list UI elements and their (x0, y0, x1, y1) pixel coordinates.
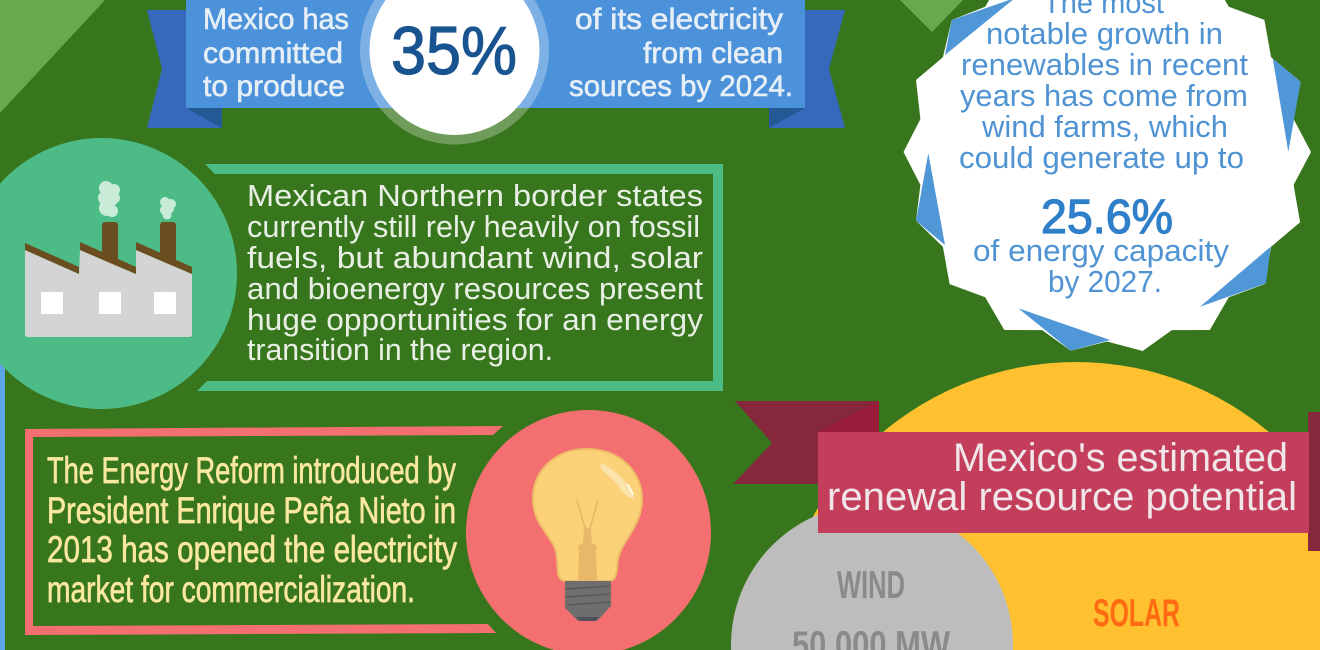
text: northern border states: huge opportunities for an energy (247, 302, 704, 337)
text: wind farms growth: notable growth in (986, 16, 1223, 51)
text: energy reform: President Enrique Peña Nieto in (47, 490, 456, 531)
ribbon text: right: of its electricity (575, 3, 783, 36)
text: energy reform: 2013 has opened the electricity (47, 529, 457, 570)
text: northern border states: currently still rely heavily on fossil (247, 209, 700, 244)
text: wind farms growth: wind farms, which (981, 109, 1228, 144)
ribbon text: right (569, 3, 793, 103)
ribbon text: right: from clean (643, 37, 783, 70)
panel: northern border states (197, 164, 723, 391)
heading text: Mexico's estimated (953, 436, 1288, 480)
ribbon text: left: committed (203, 37, 343, 70)
ribbon text: left: Mexico has (203, 3, 349, 36)
text: wind farms growth: renewables in recent (961, 47, 1248, 82)
text: energy reform (47, 450, 457, 610)
bubble: wind (731, 504, 1013, 650)
text: wind farms growth: of energy capacity (973, 233, 1230, 268)
text: northern border states: transition in the region. (247, 332, 553, 367)
ribbon text: right: sources by 2024. (569, 70, 793, 103)
ribbon text: left (203, 3, 349, 103)
icon: factory in green circle (0, 138, 237, 409)
heading text (827, 436, 1297, 519)
icon: light bulb in red circle (466, 410, 711, 650)
text: wind farms growth: years has come from (960, 78, 1248, 113)
text: northern border states: Mexican Northern border states (247, 178, 703, 213)
bubble: solar: SOLAR (1093, 592, 1180, 635)
percentage circle: 35% (360, 0, 549, 144)
panel: energy reform (25, 426, 503, 635)
ribbon text: left: to produce (203, 70, 345, 103)
text: wind farms growth: by 2027. (1048, 264, 1162, 299)
ribbon: Mexico clean electricity commitment (147, 0, 845, 144)
text: energy reform: The Energy Reform introduced by (47, 450, 456, 491)
text: northern border states: fuels, but abundant wind, solar (247, 240, 703, 275)
statistic: 25.6%: 25.6% (1041, 191, 1173, 244)
percentage circle: 35%: 35% (391, 13, 517, 89)
decorative corner triangle: top left (0, 0, 105, 113)
left blue strip (0, 360, 5, 650)
heading text: renewal resource potential (827, 475, 1297, 519)
heading banner: renewal resource potential (733, 401, 1320, 551)
decorative corner triangle: top right (900, 0, 963, 32)
text: northern border states (247, 178, 704, 367)
text: energy reform: market for commercialization. (47, 569, 415, 610)
text: northern border states: and bioenergy resources present (247, 271, 703, 306)
text: wind farms growth: could generate up to (959, 140, 1244, 175)
bubble: wind: WIND (837, 564, 905, 607)
text: wind farms growth (959, 0, 1248, 299)
badge: wind farms starburst (904, 0, 1311, 351)
